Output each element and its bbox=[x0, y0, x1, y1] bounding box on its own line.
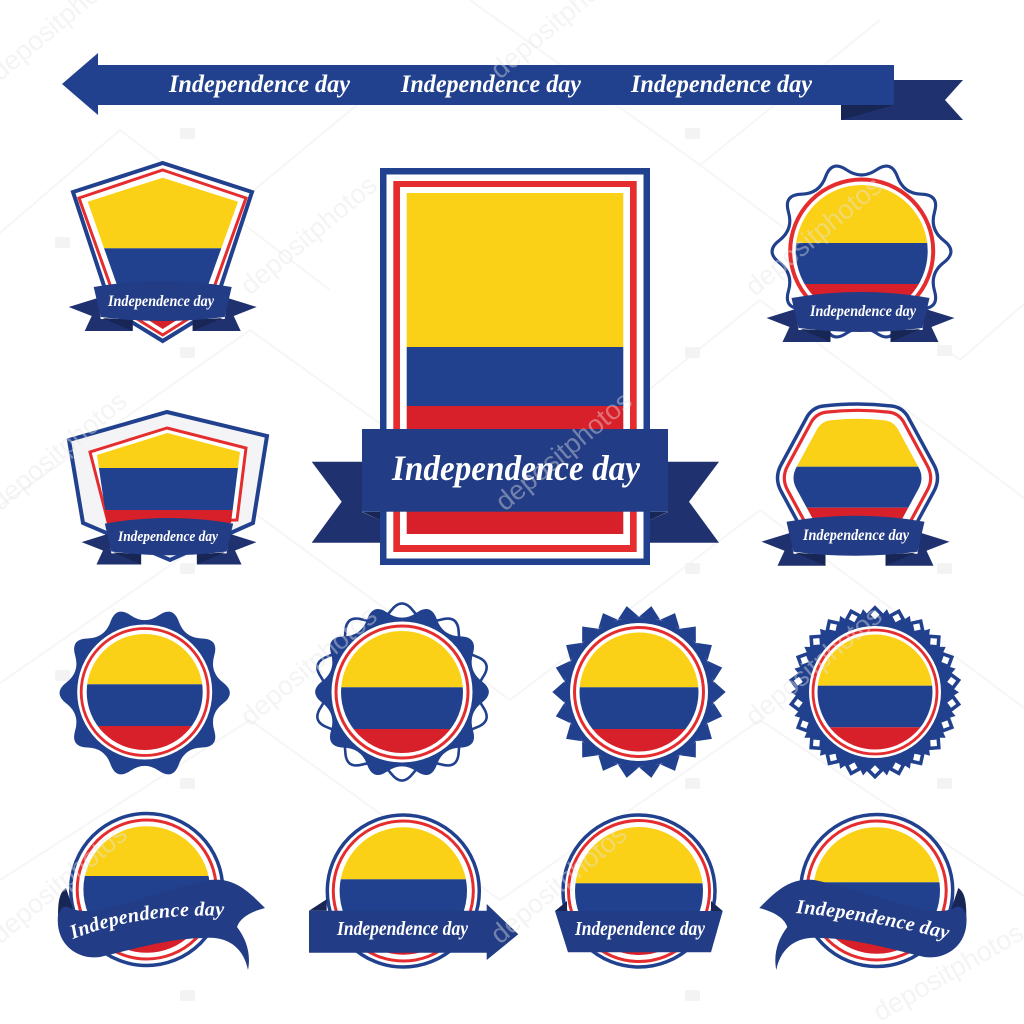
curved ribbon text bbox=[796, 913, 990, 950]
large central flag card bbox=[312, 168, 719, 565]
ribbon bbox=[82, 518, 256, 564]
ribbon bbox=[762, 516, 950, 566]
banner text: Independence day bbox=[630, 71, 813, 98]
watermarks: depositphotos bbox=[485, 819, 633, 950]
curved ribbon text bbox=[73, 915, 230, 939]
watermarks: depositphotos bbox=[490, 386, 638, 517]
top banner: arrow ribbon bbox=[62, 53, 963, 120]
round badge with swoosh ribbon, left bbox=[58, 812, 265, 970]
ribbon text: Independence day bbox=[809, 303, 917, 320]
ribbon text: Independence day bbox=[117, 529, 218, 545]
ribbon text: Independence day bbox=[574, 918, 705, 940]
watermarks: depositphotos bbox=[740, 601, 888, 732]
round badge with arrow ribbon bbox=[309, 815, 518, 967]
ribbon right tail bbox=[650, 462, 719, 543]
banner text bbox=[168, 71, 813, 98]
ribbon text: Independence day bbox=[336, 918, 468, 940]
rounded hexagon badge right bbox=[762, 404, 950, 566]
flag: blue band bbox=[407, 347, 623, 406]
round badge: star edge bbox=[552, 605, 726, 779]
round badge with swoosh ribbon, right bbox=[759, 812, 967, 970]
banner text: Independence day bbox=[400, 71, 582, 98]
ribbon fold left bbox=[362, 512, 380, 520]
watermarks: depositphotos bbox=[740, 171, 888, 302]
ribbon text: Independence day bbox=[802, 527, 910, 544]
ribbon left tail bbox=[312, 462, 380, 543]
round badge: diamond star edge bbox=[788, 605, 962, 780]
banner text: Independence day bbox=[168, 71, 351, 98]
round badge: solid wavy edge bbox=[60, 612, 230, 774]
wide shield badge left bbox=[69, 412, 267, 564]
watermarks: depositphotos bbox=[235, 170, 383, 301]
arrow ribbon bbox=[309, 904, 518, 960]
watermarks: depositphotos bbox=[235, 601, 383, 732]
wavy round badge top right bbox=[766, 166, 954, 342]
ribbon fold and swoosh ribbon bbox=[759, 880, 967, 970]
ribbon fold bbox=[309, 899, 327, 911]
ribbon text: Independence day bbox=[391, 448, 641, 488]
ribbon fold right bbox=[650, 512, 668, 520]
ribbon folds bbox=[555, 901, 723, 911]
ribbon bbox=[766, 292, 954, 342]
round badge with swoosh ribbon, left: Independence day bbox=[70, 902, 224, 940]
ribbon text: Independence day bbox=[107, 293, 215, 310]
trapezoid ribbon bbox=[555, 911, 723, 952]
ribbon fold bbox=[58, 888, 73, 915]
flag: red band bbox=[407, 406, 623, 534]
shield badge top left bbox=[69, 163, 257, 341]
round badge with swoosh ribbon, right: Independence day bbox=[796, 900, 950, 942]
round badge: wavy edge with outline bbox=[315, 602, 489, 782]
swoosh ribbon bbox=[58, 880, 265, 970]
ribbon bbox=[69, 281, 257, 331]
ribbon front bbox=[362, 429, 668, 512]
flag: yellow band bbox=[407, 193, 623, 347]
round badge with trapezoid ribbon bbox=[555, 815, 723, 967]
